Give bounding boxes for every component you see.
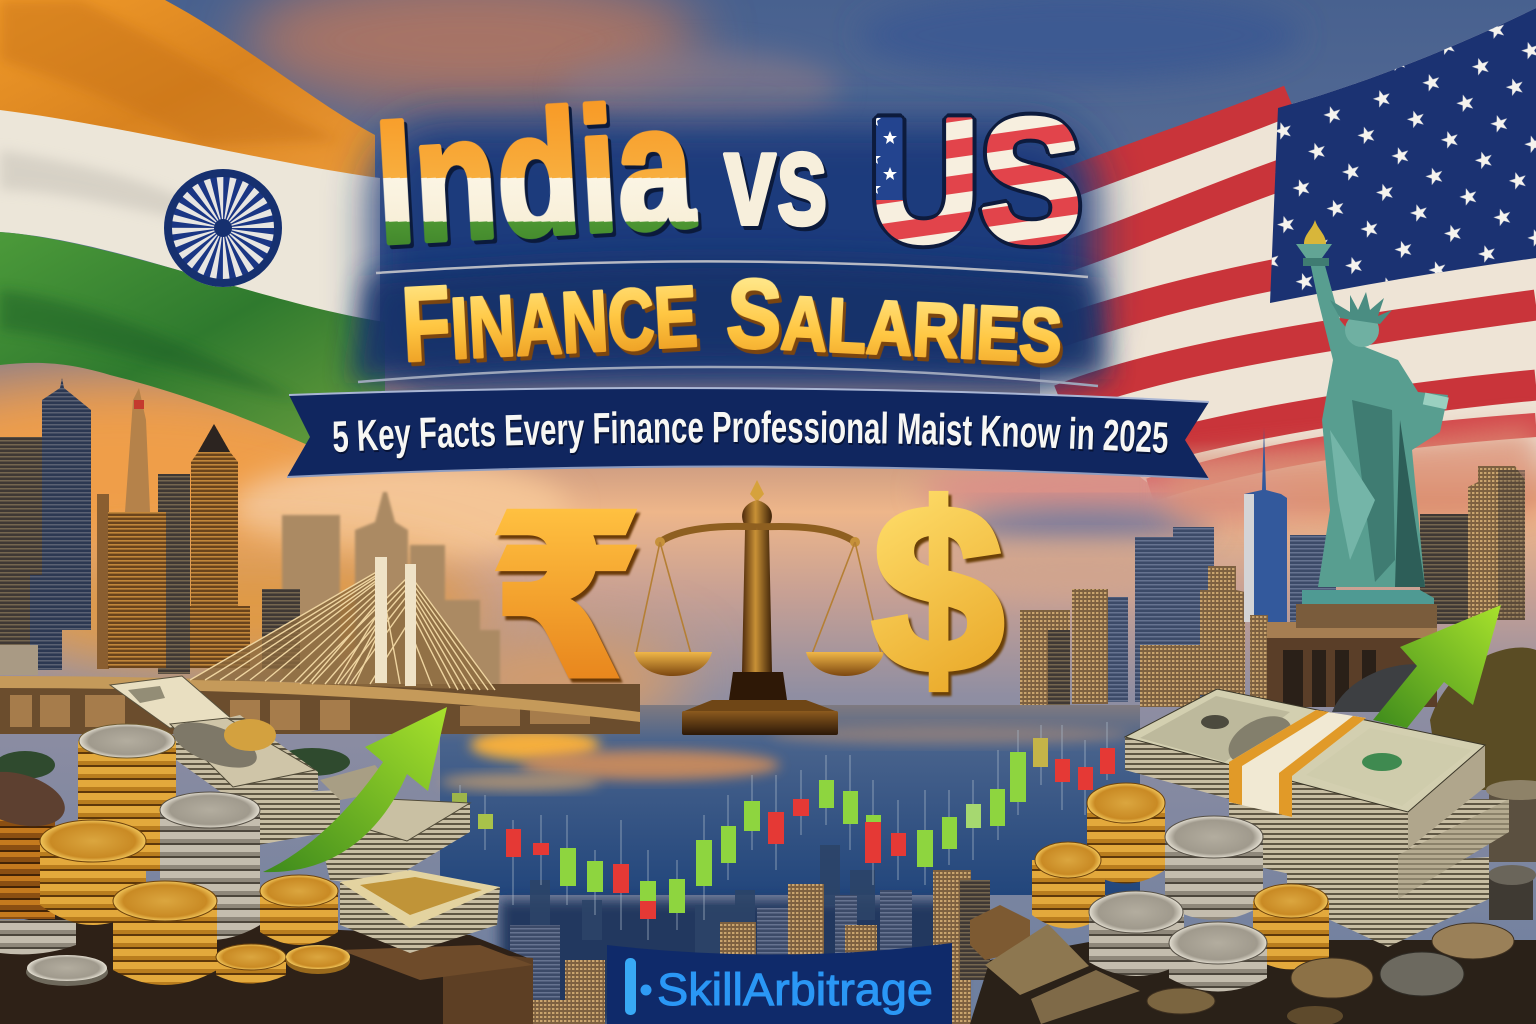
foliage left	[0, 748, 350, 779]
arrow: left growth	[263, 707, 447, 872]
icon: balance scale	[634, 480, 884, 735]
heading: Salaries: SALARIES	[724, 257, 1065, 383]
statue pedestal	[1267, 590, 1437, 707]
title: vs: vs	[724, 105, 828, 252]
flag canton	[1270, 8, 1536, 303]
icon: rupee symbol: ₹	[487, 467, 645, 730]
logo wordmark: SkillArbitrage	[657, 964, 933, 1015]
river	[440, 705, 1140, 895]
Indian flag	[0, 0, 385, 446]
right cobblestones	[970, 905, 1140, 1024]
right coin stacks	[1032, 783, 1514, 1024]
logo panel	[607, 943, 952, 1024]
trees right	[1430, 648, 1536, 790]
right dark coins	[1486, 780, 1536, 920]
subtitle ribbon	[287, 387, 1209, 480]
left coin stacks	[0, 724, 350, 986]
bundle band	[1229, 710, 1366, 817]
US flag	[1040, 8, 1536, 500]
right banknote bundles	[1125, 689, 1509, 947]
title: US: US	[869, 83, 1082, 279]
dark hill	[1332, 664, 1425, 712]
Statue of Liberty	[1267, 220, 1449, 707]
candlestick chart	[452, 722, 1115, 940]
title: India: India	[371, 68, 699, 281]
icon: Ashoka chakra	[164, 169, 282, 287]
water sunset reflection	[440, 725, 1130, 791]
foreground stone block	[340, 945, 533, 1024]
title arc band	[350, 258, 1108, 386]
left banknotes	[110, 676, 500, 953]
heading: Finance: FINANCE	[399, 251, 700, 384]
subtitle text: 5 Key Facts Every Finance Professional Maist Know in 2025	[334, 410, 1168, 460]
right skyline	[1020, 428, 1525, 710]
ground right	[970, 940, 1536, 1024]
logo mark	[625, 958, 652, 1015]
sunset fade under US flag	[1170, 425, 1536, 520]
statue figure	[1296, 220, 1449, 587]
arrow: right growth	[1373, 605, 1501, 728]
icon: dollar symbol: $	[872, 457, 1004, 722]
left skyline	[0, 378, 500, 690]
bridge	[0, 557, 640, 734]
ground left	[0, 900, 533, 1024]
lower city	[500, 845, 990, 1024]
navy title panel	[372, 122, 1097, 387]
